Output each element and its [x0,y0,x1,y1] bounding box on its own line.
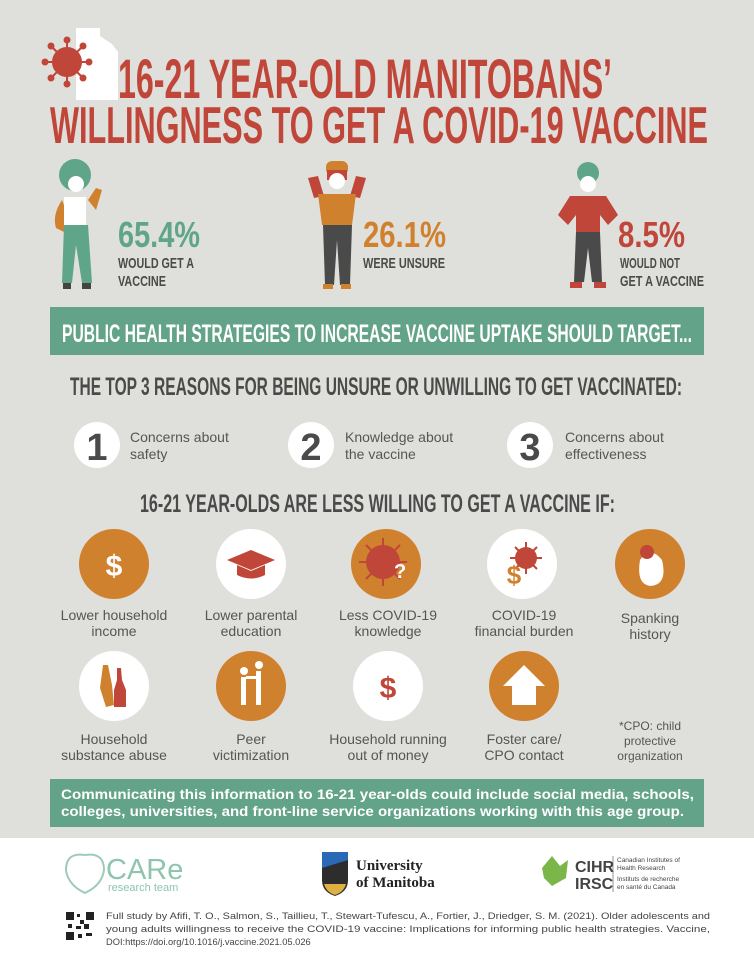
logo: University of Manitoba: University [356,858,423,874]
figure: unsure [308,161,366,289]
reason 1: Concerns about [130,429,229,445]
factor: lower parental education [205,529,297,639]
stat: 65.4% [118,214,200,290]
factor: lower household income: Lower household [61,607,167,623]
factor: foster care: CPO contact [484,747,564,763]
logo: CIHR IRSC: en santé du Canada [617,884,676,891]
factor: covid financial burden: financial burden [475,623,573,639]
logo: CARe: CARe [106,854,183,886]
note: CPO definition: organization [617,749,683,763]
citation [106,911,710,947]
logo: CIHR IRSC: CIHR [575,859,615,876]
reason 1: safety [130,446,167,462]
stat: 65.4%: WOULD GET A [118,255,194,272]
factor: covid financial burden: COVID-19 [492,607,556,623]
stat: 8.5%: 8.5% [618,214,685,255]
stat: 8.5% [618,214,704,290]
reason 3: effectiveness [565,446,646,462]
stat: 8.5%: GET A VACCINE [620,273,704,290]
logo: CARe: research team [108,882,178,894]
factor: lower household income: $ [106,550,123,583]
note: CPO definition: protective [624,734,676,748]
reason 2: the vaccine [345,446,416,462]
factor: lower parental education: education [221,623,281,639]
reason 2 [288,422,453,469]
factor: lower parental education: Lower parental [205,607,297,623]
title [50,47,708,155]
factor: peer victimization [213,651,289,763]
note: CPO definition: *CPO: child [619,719,681,733]
reason 1 [74,422,229,469]
reason 3: Concerns about [565,429,664,445]
factor: lower household income [61,529,167,639]
reason 3 [507,422,664,469]
stat: 26.1%: 26.1% [363,214,446,255]
citation: young adults willingness to receive the COVID-19 vaccine: Implications for informing public health strategies. Vaccine, [106,924,710,934]
stat: 65.4%: VACCINE [118,273,166,290]
stat: 26.1% [363,214,446,272]
factor: foster care: Foster care/ [487,731,561,747]
factor: household substance abuse: Household [81,731,147,747]
factor: peer victimization: Peer [236,731,266,747]
factor: household running out of money: Household running [329,731,447,747]
icon: manitoba map with virus [42,28,118,100]
factor: less covid knowledge: knowledge [355,623,422,639]
factor: covid financial burden [475,529,573,639]
factor: less covid knowledge: Less COVID-19 [339,607,437,623]
logo: CIHR IRSC: Health Research [617,865,666,872]
banner: public health strategies [50,307,704,355]
factor: foster care [484,651,564,763]
logo: CIHR IRSC: Instituts de recherche [617,876,680,883]
factor: household running out of money [329,651,447,763]
factor: household running out of money: $ [380,672,397,705]
logo: CIHR IRSC: Canadian Institutes of [617,857,680,864]
logo: University of Manitoba: of Manitoba [356,875,435,891]
factor: spanking history: history [629,626,671,642]
logo: CARe [66,854,183,894]
factor: less covid knowledge [339,529,437,639]
factor: household running out of money: out of money [348,747,428,763]
stat: 26.1%: WERE UNSURE [363,255,445,272]
figure: would get vaccine [55,159,102,289]
banner: communicating [50,779,704,827]
citation: Full study by Afifi, T. O., Salmon, S., Taillieu, T., Stewart-Tufescu, A., Fortier, J., Driedger, S. M. (2021). Older adolescents and [106,911,710,921]
logo: University of Manitoba [322,852,435,896]
factor: spanking history [615,529,685,642]
factor: spanking history: Spanking [621,610,679,626]
factor: lower household income: income [91,623,137,639]
logo: CIHR IRSC [542,856,680,893]
factor: household substance abuse: substance abuse [61,747,167,763]
reason 3: 3 [519,427,541,469]
icon: QR code [66,912,94,940]
factor: covid financial burden: $ [507,560,522,590]
factor: household substance abuse [61,651,167,763]
factor: less covid knowledge: ? [394,561,406,583]
logo: CIHR IRSC: IRSC [575,876,614,893]
reason 1: 1 [86,427,108,469]
factor: peer victimization: victimization [213,747,289,763]
reason 2: 2 [300,427,322,469]
figure: would not [558,162,618,288]
citation: DOI:https://doi.org/10.1016/j.vaccine.2021.05.026 [106,937,311,947]
banner: communicating: colleges, universities, and front-line service organizations working with this age group. [61,803,684,819]
note: CPO definition [617,719,683,763]
stat: 65.4%: 65.4% [118,214,200,255]
stat: 8.5%: WOULD NOT [620,255,680,272]
banner: communicating: Communicating this information to 16-21 year-olds could include social media, schools, [61,786,694,802]
reason 2: Knowledge about [345,429,453,445]
